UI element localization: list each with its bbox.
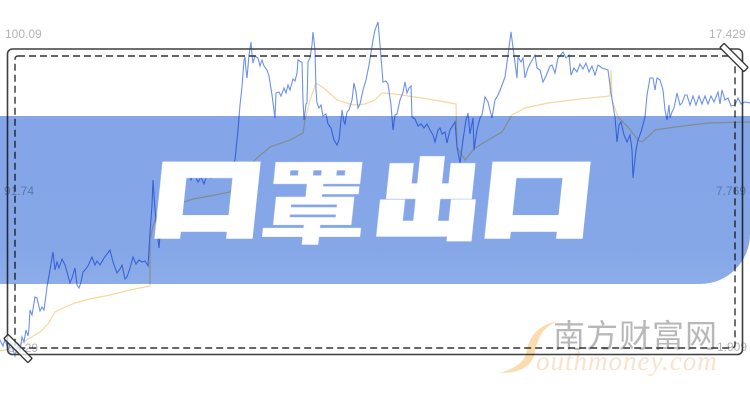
axis labels: 83.29 (8, 341, 38, 355)
watermark: southmoney logo (500, 311, 718, 376)
axis labels: 100.09 (5, 27, 42, 41)
moving average line (0, 70, 750, 351)
blue banner (0, 116, 750, 284)
axis labels: 17.429 (709, 27, 746, 41)
title: 口 (477, 129, 600, 255)
title: 出 (370, 133, 487, 256)
axis labels: 1.909 (717, 340, 747, 354)
title: 罩 (256, 133, 374, 263)
watermark url: outhmoney.com (536, 346, 718, 376)
watermark chinese name: 南方财富网 (553, 311, 718, 357)
frame: solid border (8, 49, 742, 354)
title (147, 129, 600, 263)
axis labels: 91.74 (4, 184, 34, 198)
resize handle: top right (720, 43, 748, 72)
icon: orange swoosh (500, 321, 558, 373)
axis labels: 7.769 (716, 184, 746, 198)
resize handle: bottom left (4, 334, 32, 363)
frame: dashed border (15, 56, 735, 348)
title: 口 (147, 129, 270, 255)
